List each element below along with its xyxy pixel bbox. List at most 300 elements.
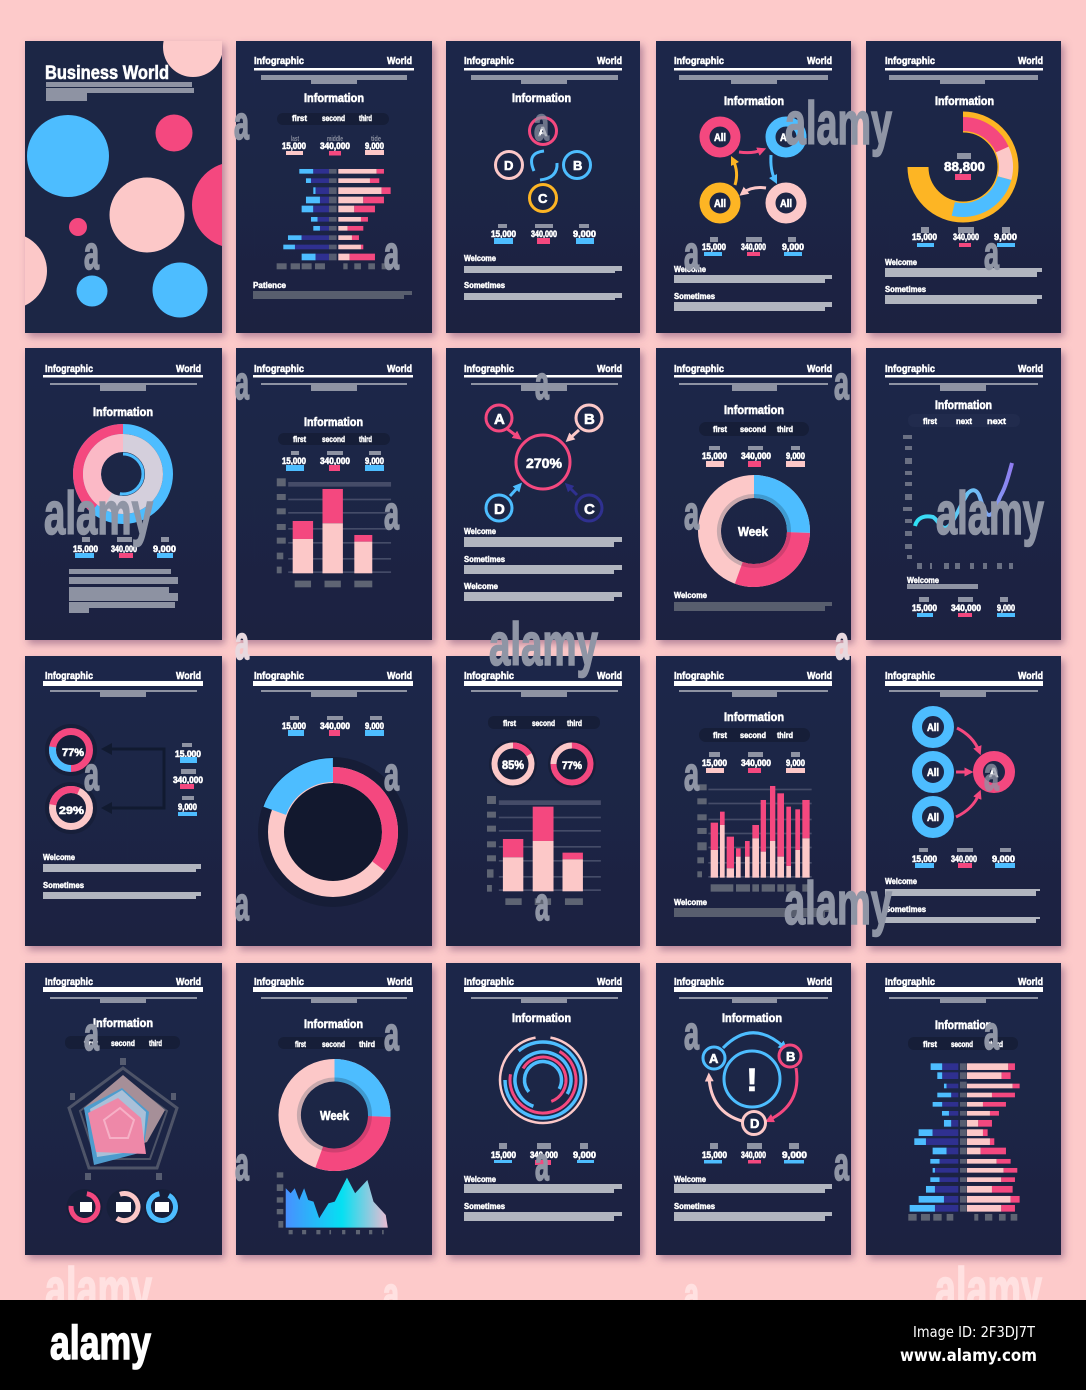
stats: 9,000 — [365, 141, 384, 151]
panel: line chart — [866, 348, 1061, 640]
stats: 9,000 — [786, 758, 805, 768]
hub and spokes diagram: A — [494, 411, 505, 428]
bar chart — [697, 784, 812, 892]
watermark: alamy over panels: a — [684, 1006, 699, 1059]
watermark: alamy over panels: a — [384, 747, 399, 800]
tab pill: first — [923, 1040, 937, 1049]
ring flow diagram — [704, 122, 802, 218]
header: Infographic — [464, 364, 514, 375]
text block: Sometimes — [885, 905, 927, 914]
area chart — [277, 1172, 388, 1234]
node diagram: D — [504, 158, 513, 173]
tab pill: third — [988, 1040, 1003, 1049]
tab pill: second — [532, 719, 555, 728]
header — [885, 56, 1043, 84]
watermark: alamy over panels: a — [984, 226, 999, 279]
tab pill: first — [293, 435, 306, 444]
cycle diagram: ! — [746, 1062, 758, 1098]
tab pill: third — [359, 435, 372, 444]
percent rings — [489, 740, 596, 788]
header — [885, 671, 1043, 697]
ring flow diagram: All — [780, 198, 792, 210]
header — [885, 977, 1043, 1003]
tab pill — [278, 433, 390, 445]
header: Infographic — [45, 671, 93, 682]
panel: big gauge — [236, 656, 432, 946]
panel: nested donut — [25, 348, 222, 640]
tab pill: second — [740, 425, 766, 434]
stats — [491, 1143, 596, 1165]
tab pill: first — [713, 731, 727, 740]
header: Infographic — [885, 977, 935, 988]
stats: 15,000 — [702, 242, 726, 252]
watermark: alamy over panels — [44, 90, 1044, 1190]
watermark: alamy over panels: a — [84, 747, 99, 800]
stats: last — [291, 136, 299, 143]
stats: 15,000 — [912, 232, 937, 242]
text block: Welcome — [464, 527, 496, 536]
heading: Information — [304, 91, 364, 105]
header: Infographic — [674, 56, 724, 67]
panel: diverging bars 2 — [866, 963, 1061, 1255]
panel: 270 percent hub — [446, 348, 640, 640]
cycle diagram: D — [750, 1116, 759, 1131]
header: World — [807, 364, 832, 375]
heading: Information — [512, 91, 571, 105]
tab pill: first — [295, 1040, 306, 1049]
text block: Welcome — [674, 1175, 706, 1184]
cycle diagram: B — [786, 1049, 795, 1064]
stats — [912, 227, 1017, 247]
donut centre label: Week — [320, 1108, 350, 1123]
percent rings — [45, 724, 97, 834]
watermark: alamy over panels: a — [234, 96, 249, 149]
watermark: alamy over panels: a — [84, 1007, 99, 1060]
bar chart — [908, 1063, 1020, 1221]
panel: week donut and area chart — [236, 963, 432, 1255]
stats: 340,000 — [320, 456, 350, 466]
header: World — [387, 671, 412, 682]
percent rings: 77% — [62, 747, 84, 759]
header — [254, 56, 414, 84]
stats: 9,000 — [992, 854, 1015, 864]
side stats: 15,000 — [175, 749, 201, 759]
header: Infographic — [885, 364, 935, 375]
stats — [702, 446, 805, 467]
stats: 15,000 — [282, 141, 306, 151]
text block — [253, 281, 412, 299]
gauge centre value — [944, 153, 985, 180]
stats — [282, 451, 384, 471]
stats: 9,000 — [997, 603, 1015, 613]
header: World — [176, 671, 201, 682]
text block — [674, 898, 832, 917]
nested donut chart — [60, 411, 186, 537]
chart note: Welcome — [907, 576, 939, 585]
bar chart — [277, 169, 391, 269]
stats: 340,000 — [741, 758, 771, 768]
stats: 340,000 — [741, 1150, 766, 1160]
watermark: alamy over panels: alamy — [44, 480, 153, 547]
watermark: alamy over panels: a — [534, 97, 549, 150]
node diagram: C — [538, 191, 548, 206]
stats: 340,000 — [741, 242, 766, 252]
panel: cover Business World — [22, 40, 230, 342]
text block: Welcome — [674, 591, 708, 600]
text block — [464, 254, 622, 300]
radar chart — [69, 1058, 177, 1180]
node diagram: A — [538, 124, 548, 139]
watermark: alamy over panels: a — [834, 1137, 849, 1190]
header: World — [597, 364, 622, 375]
header — [464, 364, 622, 391]
text block — [464, 527, 622, 601]
tab pill: third — [777, 425, 793, 434]
text block: Welcome — [885, 877, 917, 886]
stats: 9,000 — [365, 721, 384, 731]
cycle diagram — [703, 1033, 801, 1134]
header — [674, 56, 832, 84]
stats: 9,000 — [153, 544, 176, 554]
side stats: 340,000 — [173, 775, 203, 785]
tab pill: first — [923, 417, 937, 426]
tab pill: second — [111, 1039, 135, 1048]
header: Infographic — [674, 977, 724, 988]
tab pill — [65, 1036, 180, 1049]
text block — [464, 1175, 622, 1221]
text block: Sometimes — [464, 1202, 506, 1211]
watermark: alamy over panels: a — [684, 226, 699, 279]
heading: Information — [724, 94, 784, 108]
stats — [912, 597, 1015, 617]
header — [253, 671, 413, 697]
stats: 9,000 — [782, 1150, 807, 1160]
cover subtitle — [46, 82, 194, 101]
heading: Information — [93, 1016, 153, 1030]
tab pill: third — [777, 731, 793, 740]
text block — [674, 591, 832, 611]
stats: 15,000 — [702, 451, 727, 461]
stats: 15,000 — [912, 603, 937, 613]
text block: Welcome — [885, 258, 917, 267]
header: World — [387, 977, 412, 988]
header — [43, 671, 203, 697]
bar chart — [277, 478, 391, 587]
header: Infographic — [464, 56, 514, 67]
stats: 340,000 — [953, 232, 979, 242]
stats — [491, 224, 596, 244]
watermark: alamy on pink background: a — [383, 1267, 400, 1320]
panel: yellow radial gauge — [866, 41, 1061, 333]
header — [253, 977, 413, 1003]
header — [464, 671, 622, 697]
watermark: alamy over panels: a — [984, 747, 999, 800]
flow diagram: A — [989, 765, 999, 780]
stats: 340,000 — [320, 721, 350, 731]
tab pill — [908, 414, 1020, 427]
text block: Welcome — [674, 898, 708, 907]
hub and spokes diagram — [486, 405, 602, 521]
stats: 340,000 — [951, 603, 981, 613]
stats: 9,000 — [994, 232, 1017, 242]
watermark: alamy on pink background: a — [684, 1267, 699, 1320]
header — [464, 56, 622, 84]
header: World — [597, 56, 622, 67]
panel: three to one flow — [866, 656, 1061, 946]
panel: stacked bars A — [236, 348, 432, 640]
header: World — [176, 364, 201, 375]
text block — [674, 1175, 832, 1221]
node diagram: B — [573, 158, 582, 173]
bar chart — [487, 796, 601, 905]
stats: 15,000 — [702, 1150, 727, 1160]
stats: 15,000 — [491, 1150, 516, 1160]
watermark: alamy on pink background — [45, 1256, 1042, 1323]
stats: 340,000 — [531, 229, 557, 239]
header: Infographic — [674, 364, 724, 375]
tab pill: next — [987, 417, 1006, 426]
stats: tide — [371, 136, 381, 143]
panel: four node cycle — [446, 41, 640, 333]
panel: diverging bars 1 — [236, 41, 432, 333]
heading: Information — [724, 710, 784, 724]
watermark: alamy over panels: a — [235, 877, 249, 930]
stats: 15,000 — [491, 229, 516, 239]
stats — [912, 848, 1015, 868]
text block — [885, 877, 1040, 923]
text block: Sometimes — [885, 285, 927, 294]
gauge centre value: 88,800 — [944, 159, 985, 174]
header: World — [176, 977, 201, 988]
text block: Sometimes — [674, 1202, 716, 1211]
percent rings: 85% — [502, 758, 524, 772]
watermark: alamy over panels: a — [984, 1006, 999, 1059]
header: Infographic — [464, 671, 514, 682]
stats — [702, 1143, 807, 1164]
tab pill — [699, 422, 809, 436]
stats — [702, 237, 804, 256]
line chart — [903, 435, 1013, 569]
watermark: alamy over panels: a — [535, 877, 549, 930]
watermark: alamy over panels: a — [535, 356, 549, 409]
heading: Information — [935, 94, 994, 108]
tab pill: second — [322, 1040, 345, 1049]
tab pill: third — [149, 1039, 162, 1048]
panel: radar chart — [25, 963, 222, 1255]
header: World — [807, 671, 832, 682]
panel: cycle with exclamation — [656, 963, 851, 1255]
header: Infographic — [45, 977, 93, 988]
percent rings: 77% — [562, 760, 582, 772]
tab pill: next — [956, 417, 972, 426]
tab pill: second — [740, 731, 766, 740]
text block: Welcome — [464, 582, 499, 591]
hub and spokes diagram: D — [494, 501, 505, 518]
panel: many stacked bars — [656, 656, 851, 946]
heading: Information — [935, 1018, 992, 1032]
tab pill — [277, 113, 389, 125]
panel: percent rings with bracket — [25, 656, 222, 946]
header: World — [1018, 364, 1043, 375]
text block — [674, 265, 832, 311]
flow diagram: All — [927, 722, 939, 734]
tab pill — [278, 1037, 388, 1049]
header: World — [387, 56, 412, 67]
tab pill: third — [567, 719, 582, 728]
header: Infographic — [885, 671, 935, 682]
heading: Information — [724, 403, 784, 417]
watermark: alamy over panels: alamy — [785, 90, 892, 157]
text block — [69, 569, 178, 613]
cycle diagram: A — [709, 1051, 719, 1066]
website: www.alamy.com — [900, 1346, 1037, 1366]
stats: 9,000 — [782, 242, 804, 252]
footer bar — [0, 1300, 1086, 1390]
text block: Welcome — [464, 254, 496, 263]
cover title: Business World — [45, 63, 169, 84]
ring flow diagram: All — [714, 198, 726, 210]
stats: 340,000 — [951, 854, 977, 864]
radial gauge — [906, 110, 1020, 224]
tab pill — [488, 716, 600, 729]
flow diagram: All — [927, 767, 939, 779]
watermark: alamy on pink background: alamy — [45, 1256, 152, 1323]
bracket arrows — [101, 743, 164, 814]
header: Infographic — [45, 364, 93, 375]
stats: middle — [327, 136, 343, 143]
watermark: alamy over panels: alamy — [489, 611, 598, 678]
tab pill: second — [322, 114, 345, 123]
tab pill: first — [292, 114, 307, 123]
header: World — [597, 977, 622, 988]
stats: 15,000 — [282, 721, 306, 731]
stats: 15,000 — [282, 456, 306, 466]
header: Infographic — [674, 671, 724, 682]
header: World — [1018, 671, 1043, 682]
header — [43, 977, 203, 1003]
heading: Information — [304, 415, 363, 429]
header: World — [807, 56, 832, 67]
header: World — [387, 364, 412, 375]
side stats — [173, 743, 203, 816]
stats: 15,000 — [912, 854, 937, 864]
header: Infographic — [254, 671, 304, 682]
watermark: alamy over panels: alamy — [784, 870, 892, 937]
tab pill: first — [713, 425, 727, 434]
chart note — [907, 576, 978, 589]
donut centre label: Week — [738, 524, 769, 539]
concentric arc chart — [489, 1026, 597, 1134]
heading: Information — [93, 405, 153, 419]
header: Infographic — [254, 364, 304, 375]
image id: Image ID: 2F3DJ7T — [913, 1323, 1036, 1341]
watermark: alamy over panels: a — [684, 486, 699, 539]
header: Infographic — [254, 977, 304, 988]
heading: Information — [304, 1017, 363, 1031]
header — [43, 364, 203, 391]
stats: 15,000 — [73, 544, 98, 554]
stats: 9,000 — [573, 229, 596, 239]
heading: Information — [935, 398, 992, 412]
text block: Patience — [253, 281, 287, 290]
small donuts — [66, 1189, 180, 1225]
stats: 9,000 — [786, 451, 805, 461]
watermark: alamy over panels: a — [235, 1137, 249, 1190]
stats: 9,000 — [573, 1150, 596, 1160]
watermark: alamy over panels: a — [384, 486, 399, 539]
panel: four ring flow — [656, 41, 851, 333]
ring flow diagram: All — [714, 132, 726, 144]
watermark: alamy over panels: a — [834, 356, 849, 409]
gauge chart — [254, 753, 412, 911]
text block: Sometimes — [43, 881, 85, 890]
text block: Sometimes — [464, 555, 506, 564]
header: World — [1018, 977, 1043, 988]
header: World — [1018, 56, 1043, 67]
flow diagram: All — [927, 812, 939, 824]
tab pill — [908, 1037, 1018, 1050]
stats — [73, 537, 176, 558]
watermark: alamy over panels: a — [84, 226, 99, 279]
stats — [282, 716, 384, 736]
heading: Information — [512, 1011, 571, 1025]
stats: 340,000 — [530, 1150, 558, 1160]
text block — [885, 258, 1042, 304]
header — [674, 364, 832, 391]
text block: Sometimes — [674, 292, 716, 301]
header — [674, 671, 832, 697]
tab pill: first — [84, 1039, 98, 1048]
ring flow diagram: All — [780, 132, 792, 144]
hub and spokes diagram: 270% — [526, 455, 563, 471]
node diagram — [496, 118, 590, 212]
watermark: alamy over panels: a — [535, 1137, 549, 1190]
text block: Welcome — [43, 853, 75, 862]
header: World — [807, 977, 832, 988]
stats: 340,000 — [320, 141, 350, 151]
flow diagram — [917, 711, 1010, 833]
watermark: alamy over panels: a — [384, 226, 399, 279]
header — [674, 977, 832, 1003]
header — [253, 364, 413, 391]
stats — [702, 752, 805, 773]
side stats: 9,000 — [178, 802, 197, 812]
watermark: alamy over panels: a — [384, 1007, 399, 1060]
donut chart — [288, 1068, 381, 1162]
stats: 15,000 — [702, 758, 727, 768]
watermark: alamy over panels: a — [684, 747, 699, 800]
stats: 9,000 — [365, 456, 384, 466]
header: Infographic — [254, 56, 304, 67]
header: Infographic — [885, 56, 935, 67]
tab pill: third — [359, 1040, 375, 1049]
text block: Welcome — [674, 265, 706, 274]
header: Infographic — [464, 977, 514, 988]
donut chart — [708, 485, 800, 577]
hub and spokes diagram: B — [584, 411, 595, 428]
watermark: alamy over panels: a — [235, 616, 249, 669]
stats — [282, 136, 384, 156]
panel: concentric arcs — [446, 963, 640, 1255]
tab pill — [699, 728, 810, 742]
panel: week donut — [656, 348, 851, 640]
text block: Sometimes — [464, 281, 506, 290]
text block: Welcome — [464, 1175, 496, 1184]
tab pill: second — [322, 435, 345, 444]
hub and spokes diagram: C — [584, 501, 595, 518]
heading: Information — [722, 1011, 782, 1025]
cover circles — [25, 41, 222, 318]
